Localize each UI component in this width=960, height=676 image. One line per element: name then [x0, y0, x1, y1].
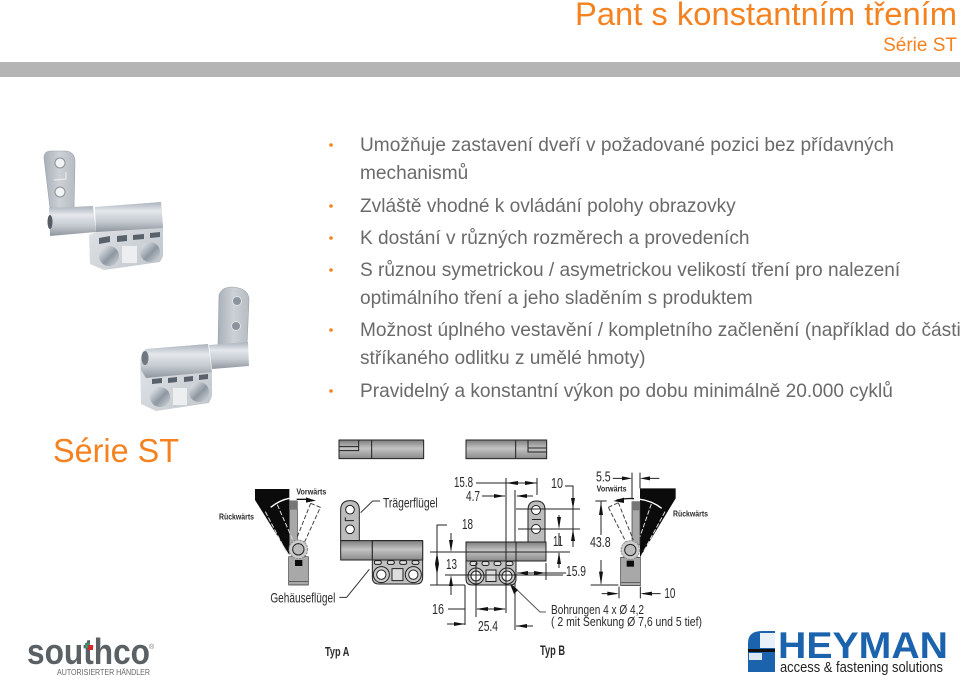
drilling note — [551, 602, 702, 629]
hinge photo: lower — [140, 287, 249, 411]
top view B — [466, 440, 547, 459]
motion diagram A: Rückwärts — [219, 512, 254, 522]
motion diagram A — [219, 486, 326, 585]
bullet list: Pravidelný a konstantní výkon po dobu minimálně 20.000 cyklů — [360, 381, 893, 402]
dimension numbers: 4.7 — [466, 489, 480, 505]
motion diagram B — [590, 469, 708, 602]
dimension lines — [430, 478, 580, 630]
dimension numbers: 10 — [551, 476, 563, 492]
drilling note: ( 2 mit Senkung Ø 7,6 und 5 tief) — [551, 614, 702, 629]
dimension numbers: 16 — [432, 602, 444, 618]
bullet list — [329, 135, 960, 402]
dimension numbers: 11 — [553, 534, 563, 550]
drilling note: Bohrungen 4 x Ø 4,2 — [551, 602, 644, 617]
bullet list: mechanismů — [360, 163, 468, 184]
hinge photo: upper — [44, 151, 163, 270]
bullet list: Umožňuje zastavení dveří v požadované pozici bez přídavných — [360, 135, 894, 156]
bullet list: K dostání v různých rozměrech a provedeních — [360, 228, 750, 249]
bullet list: optimálního tření a jeho sladěním s produktem — [360, 288, 753, 309]
logo: Heyman — [748, 625, 948, 676]
dimension numbers: 15.8 — [454, 475, 473, 491]
technical drawing: type A — [219, 440, 438, 659]
dimension numbers — [432, 475, 586, 635]
bullet list: Možnost úplného vestavění / kompletního začlenění (například do části — [360, 320, 960, 341]
dimension numbers: 13 — [446, 557, 457, 573]
label: Typ A: Typ A — [325, 644, 350, 659]
logo: Heyman: HEYMAN — [778, 625, 948, 666]
dimension numbers: 25.4 — [478, 619, 498, 635]
motion diagram B: 5.5 — [596, 469, 611, 485]
motion diagram A: Vorwärts — [296, 486, 326, 496]
callout: Trägerflügel — [361, 495, 438, 513]
header bar — [0, 62, 960, 77]
bullet list: stříkaného odlitku z umělé hmoty) — [360, 348, 645, 369]
callout: Trägerflügel: Trägerflügel — [383, 495, 438, 510]
callout: Gehäuseflügel: Gehäuseflügel — [270, 591, 335, 606]
motion diagram B: 43.8 — [590, 535, 611, 551]
top view A — [339, 440, 424, 459]
series heading: Série ST — [53, 432, 179, 469]
subtitle: Série ST — [883, 35, 957, 56]
dimension numbers: 18 — [462, 517, 473, 533]
label: Typ B: Typ B — [540, 643, 565, 658]
dimension numbers: 15.9 — [566, 564, 586, 580]
dimension arrows — [435, 481, 575, 628]
hinge outline B — [466, 501, 546, 585]
hinge outline A — [341, 501, 423, 584]
logo: Southco: ® — [149, 643, 155, 651]
logo: Southco: southco — [27, 631, 150, 672]
bullet list: S různou symetrickou / asymetrickou velikostí tření pro nalezení — [360, 260, 901, 281]
bullet list: Zvláště vhodné k ovládání polohy obrazovky — [360, 196, 736, 217]
motion diagram B: Vorwärts — [597, 483, 627, 493]
callout: Gehäuseflügel — [270, 569, 369, 606]
motion diagram B: 10 — [664, 586, 675, 602]
motion diagram B: Rückwärts — [673, 508, 708, 518]
